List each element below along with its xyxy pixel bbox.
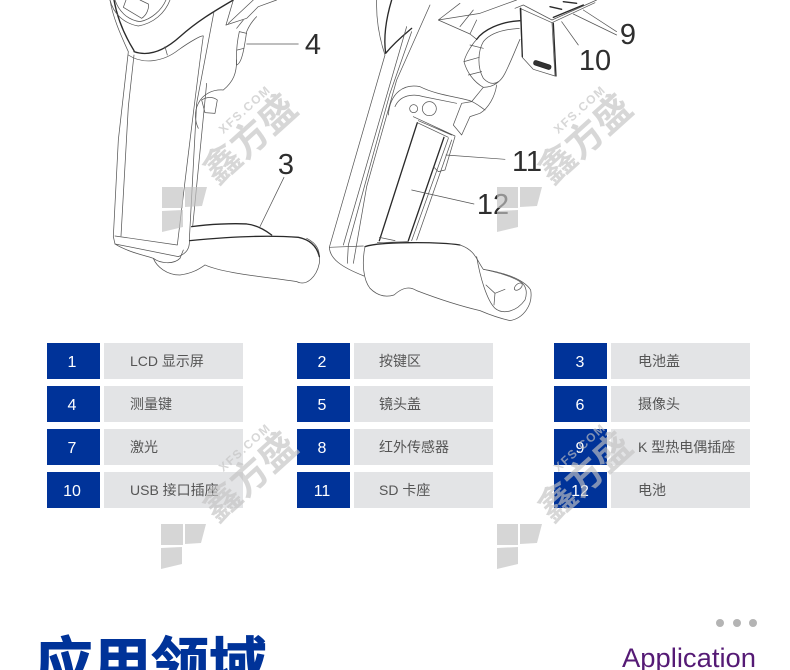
row: 3 电池盖: 3 bbox=[576, 354, 585, 371]
row: 10 USB 接口插座: USB 接口插座 bbox=[130, 482, 219, 498]
row: 5 镜头盖: 5 bbox=[318, 397, 327, 414]
watermark: bottom right: XFS.COM bbox=[551, 420, 609, 474]
watermark: bottom right: 鑫方盛 bbox=[530, 425, 640, 529]
watermark: bottom left: XFS.COM bbox=[216, 420, 274, 474]
row: 6 摄像头: 摄像头 bbox=[638, 396, 680, 412]
parts table bbox=[47, 343, 750, 508]
decorative dots bbox=[716, 619, 757, 627]
watermark: top right: XFS.COM bbox=[551, 82, 609, 136]
watermark: top right bbox=[497, 78, 640, 232]
row: 1 LCD 显示屏 bbox=[47, 343, 243, 379]
row: 10 USB 接口插座: 10 bbox=[63, 483, 81, 500]
label: 11: 11 bbox=[512, 146, 542, 178]
row: 6 摄像头 bbox=[554, 386, 750, 422]
watermark: top right: 鑫方盛 bbox=[530, 87, 640, 191]
watermark: bottom left: 鑫方盛 bbox=[195, 425, 305, 529]
row: 5 镜头盖: 镜头盖 bbox=[379, 396, 421, 412]
row: 10 USB 接口插座 bbox=[47, 472, 243, 508]
row: 8 红外传感器: 红外传感器 bbox=[379, 439, 449, 455]
row: 7 激光: 激光 bbox=[130, 439, 158, 455]
row: 9 K 型热电偶插座 bbox=[554, 429, 750, 465]
row: 12 电池: 电池 bbox=[638, 482, 666, 498]
row: 11 SD 卡座: SD 卡座 bbox=[379, 482, 430, 498]
label: 10: 10 bbox=[579, 45, 611, 77]
illustration: left device view bbox=[110, 0, 320, 283]
row: 8 红外传感器: 8 bbox=[318, 440, 327, 457]
row: 11 SD 卡座: 11 bbox=[314, 483, 330, 500]
row: 12 电池: 12 bbox=[571, 483, 589, 500]
row: 2 按键区 bbox=[297, 343, 493, 379]
row: 7 激光: 7 bbox=[68, 440, 77, 457]
label: 12: 12 bbox=[477, 189, 509, 221]
label: 4: 4 bbox=[305, 29, 321, 61]
row: 11 SD 卡座 bbox=[297, 472, 493, 508]
illustration: right device view bbox=[329, 0, 617, 321]
label: 3: 3 bbox=[278, 149, 294, 181]
row: 3 电池盖: 电池盖 bbox=[638, 353, 680, 369]
row: 9 K 型热电偶插座: 9 bbox=[576, 440, 585, 457]
label: 9: 9 bbox=[620, 19, 636, 51]
row: 2 按键区: 按键区 bbox=[379, 353, 421, 369]
row: 1 LCD 显示屏: LCD 显示屏 bbox=[130, 353, 204, 369]
row: 4 测量键 bbox=[47, 386, 243, 422]
row: 7 激光 bbox=[47, 429, 243, 465]
row: 4 测量键: 4 bbox=[68, 397, 77, 414]
watermark: top left: XFS.COM bbox=[216, 82, 274, 136]
row: 3 电池盖 bbox=[554, 343, 750, 379]
row: 6 摄像头: 6 bbox=[576, 397, 585, 414]
watermark: top left bbox=[162, 78, 305, 232]
row: 1 LCD 显示屏: 1 bbox=[68, 354, 77, 371]
row: 12 电池 bbox=[554, 472, 750, 508]
watermark: top left: 鑫方盛 bbox=[195, 87, 305, 191]
row: 2 按键区: 2 bbox=[318, 354, 327, 371]
row: 5 镜头盖 bbox=[297, 386, 493, 422]
row: 9 K 型热电偶插座: K 型热电偶插座 bbox=[638, 439, 735, 455]
row: 8 红外传感器 bbox=[297, 429, 493, 465]
watermark: bottom right bbox=[497, 416, 640, 569]
watermark: bottom left bbox=[161, 416, 305, 569]
row: 4 测量键: 测量键 bbox=[130, 396, 172, 412]
